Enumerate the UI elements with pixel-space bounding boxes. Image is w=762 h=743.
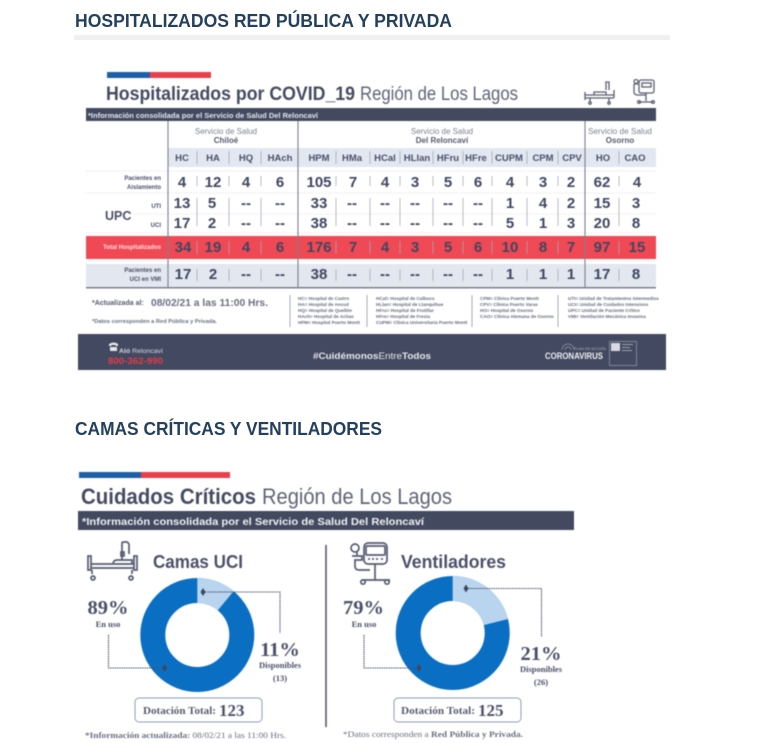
legend of abbreviations: HFre= Hospital de Fresia [376, 314, 430, 319]
hashtag: #Cuidémonos EntreTodos [313, 351, 431, 362]
table bands [86, 148, 656, 288]
row: aislamiento: 6 [276, 174, 284, 191]
row labels: Pacientes en [124, 268, 161, 274]
row: UCI: 38 [311, 215, 327, 232]
row: UCI: 20 [594, 215, 610, 232]
row: UCI en VMI: -- [275, 266, 285, 283]
service headers: Del Reloncaví [416, 136, 469, 145]
row: total hospitalizados [175, 239, 645, 256]
legend of abbreviations: HPM= Hospital Puerto Montt [298, 320, 360, 325]
hospital codes [175, 153, 646, 164]
phone number: 800-362-990 [108, 356, 163, 366]
legend of abbreviations: HO= Hospital de Osorno [480, 308, 533, 313]
row: total hospitalizados: 15 [629, 239, 645, 256]
panel title: Cuidados Críticos [81, 484, 256, 509]
row: aislamiento: 4 [381, 174, 390, 191]
row: aislamiento: 4 [242, 174, 251, 191]
information bar: *Información consolidada por el Servicio de Salud Del Reloncaví [82, 516, 425, 528]
row: total hospitalizados: 8 [539, 239, 547, 256]
row: UTI: 4 [539, 195, 548, 212]
row: UTI: -- [473, 195, 483, 212]
row: aislamiento: 4 [506, 174, 515, 191]
heading: ventiladores: Ventiladores [401, 552, 506, 572]
row labels: Pacientes en [124, 176, 161, 182]
service headers: Chiloé [214, 136, 239, 145]
row: total hospitalizados: 5 [444, 239, 452, 256]
hospital codes: HFru [437, 153, 459, 164]
row: UCI: -- [380, 215, 390, 232]
row: UTI: -- [410, 195, 420, 212]
row: UCI: 1 [539, 215, 547, 232]
hospital codes: CAO [624, 153, 646, 164]
row: UCI en VMI: 17 [175, 266, 191, 283]
hospital codes: HMa [342, 153, 363, 164]
row: aislamiento: 105 [306, 174, 332, 191]
row: total hospitalizados: 176 [306, 239, 332, 256]
UPC label: UPC [105, 209, 131, 223]
row: UTI: 5 [208, 195, 216, 212]
row labels: UTI [151, 204, 161, 210]
update note: *Datos corresponden a Red Pública y Privada. [92, 319, 218, 325]
row: UCI: -- [275, 215, 285, 232]
legend of abbreviations [298, 296, 659, 325]
hospital codes: HO [596, 153, 610, 164]
row: UCI [174, 215, 640, 232]
row: aislamiento [178, 174, 642, 191]
row: total hospitalizados: 6 [474, 239, 482, 256]
icon: phone [109, 342, 118, 351]
service headers [195, 127, 652, 145]
legend of abbreviations: CPM= Clínica Puerto Montt [480, 296, 539, 301]
stat: 21% disponibles [520, 643, 563, 687]
row: total hospitalizados: 19 [205, 239, 221, 256]
hospital codes: HAch [268, 153, 293, 164]
row labels: Aislamiento [127, 185, 161, 191]
row: UCI: 2 [208, 215, 216, 232]
row: UTI: 15 [594, 195, 610, 212]
row: UTI: 13 [174, 195, 190, 212]
row: total hospitalizados: 4 [381, 239, 390, 256]
hospital codes: CUPM [495, 153, 523, 164]
stat: 89% en uso [88, 597, 128, 629]
row: aislamiento: 2 [567, 174, 575, 191]
row: UCI en VMI: 2 [209, 266, 217, 283]
row: aislamiento: 12 [205, 174, 221, 191]
icon: ventilator [634, 80, 654, 103]
row: total hospitalizados: 6 [276, 239, 284, 256]
stat: 11% disponibles: 11% [260, 639, 300, 661]
row: UCI en VMI: -- [473, 266, 483, 283]
row: total hospitalizados: 7 [349, 239, 357, 256]
panel: cuidados criticos [78, 472, 574, 740]
donut: camas UCI 89/11 [153, 590, 242, 680]
panel title [106, 84, 518, 105]
stat: 11% disponibles: Disponibles [259, 660, 302, 670]
row: aislamiento: 6 [474, 174, 482, 191]
service column dividers [168, 121, 585, 288]
legend separators [290, 295, 558, 327]
service headers: Osorno [606, 136, 634, 145]
total box: 125: 125 [478, 701, 504, 720]
note: data scope: *Datos corresponden a Red Pública y Privada. [343, 729, 523, 739]
flag colour bar [79, 472, 230, 478]
row labels: UCI [151, 223, 161, 229]
stat: 21% disponibles: (26) [534, 677, 548, 687]
hospital codes: HA [206, 153, 220, 164]
row labels: Total Hospitalizados [103, 245, 162, 251]
phone line: Aló Reloncaví [119, 348, 163, 355]
row: UCI: 5 [506, 215, 514, 232]
row: aislamiento: 3 [539, 174, 547, 191]
row: UCI en VMI: -- [347, 266, 357, 283]
row: UCI en VMI: 1 [567, 266, 575, 283]
heading: camas criticas: CAMAS CRÍTICAS Y VENTILADORES [75, 418, 382, 439]
row: UTI [174, 195, 640, 212]
legend of abbreviations: HFru= Hospital de Frutillar [376, 308, 434, 313]
row: aislamiento: 62 [594, 174, 610, 191]
row: UCI en VMI: 38 [311, 266, 327, 283]
stat: 21% disponibles: 21% [520, 643, 562, 665]
row: aislamiento: 4 [633, 174, 642, 191]
stat: 21% disponibles: Disponibles [520, 664, 563, 674]
total box: 123: 123 [219, 701, 244, 720]
row: UCI: -- [410, 215, 420, 232]
stat: 79% en uso [343, 597, 384, 629]
stat: 11% disponibles: (13) [273, 673, 287, 683]
update note: 08/02/21 a las 11:00 Hrs. [151, 298, 268, 309]
total box: 125: Dotación Total: [401, 705, 475, 717]
leader: en uso [108, 635, 167, 672]
row: UTI: -- [443, 195, 453, 212]
legend of abbreviations: CPV= Clínica Puerto Varas [480, 302, 538, 307]
hospital codes: CPM [532, 153, 554, 164]
flag colour bar [107, 72, 211, 78]
row: total hospitalizados: 4 [242, 239, 251, 256]
row: UCI en VMI: -- [241, 266, 251, 283]
icon: bed [88, 542, 137, 580]
information bar [78, 511, 574, 530]
hospital codes: HPM [308, 153, 330, 164]
leader: en uso [364, 635, 422, 672]
row: UTI: 2 [567, 195, 575, 212]
legend of abbreviations: HLlan= Hospital de Llanquihue [376, 302, 444, 307]
plan de accion label: PLAN DE ACCIÓN [574, 346, 606, 351]
legend of abbreviations: HC= Hospital de Castro [298, 296, 349, 301]
row: aislamiento: 4 [178, 174, 187, 191]
hospital codes: HC [175, 153, 189, 164]
row: UCI: -- [241, 215, 251, 232]
row: aislamiento: 3 [411, 174, 419, 191]
leader: disponibles [200, 588, 280, 633]
row: total hospitalizados: 97 [594, 239, 610, 256]
stat: 79% en uso: En uso [352, 619, 376, 629]
leader: disponibles [464, 584, 542, 637]
total box: 125 [394, 698, 521, 722]
row: UCI en VMI: -- [380, 266, 390, 283]
cell separators [197, 151, 619, 281]
service headers: Servicio de Salud [588, 127, 652, 136]
information bar: *Información consolidada por el Servicio de Salud Del Reloncaví [88, 113, 319, 120]
row: total hospitalizados: 3 [411, 239, 419, 256]
row: UTI: 3 [632, 195, 640, 212]
stat: 11% disponibles [259, 639, 302, 683]
row: aislamiento: 7 [349, 174, 357, 191]
donut: ventiladores 79/21 [408, 588, 497, 678]
legend of abbreviations: CAO= Clínica Alemana de Osorno [480, 314, 554, 319]
divider [325, 545, 327, 727]
row: total hospitalizados: 34 [175, 239, 192, 256]
row: total hospitalizados: 7 [567, 239, 575, 256]
hospital codes: HCal [374, 153, 396, 164]
stat: 79% en uso: 79% [343, 597, 384, 619]
service headers: Servicio de Salud [195, 127, 257, 136]
row labels: UCI en VMI [130, 277, 161, 283]
logo box [610, 342, 636, 366]
row labels [103, 176, 162, 283]
panel title [81, 484, 452, 509]
update note: *Actualizada al: [92, 300, 144, 307]
icon: coronavirus arc [562, 344, 574, 350]
row: UTI: 33 [311, 195, 327, 212]
legend of abbreviations: UCI= Unidad de Cuidados Intensivos [568, 302, 649, 307]
panel title: Región de Los Lagos [360, 84, 518, 105]
stat: 89% en uso: 89% [88, 597, 128, 619]
row: UTI: -- [275, 195, 285, 212]
hospital codes: HQ [239, 153, 253, 164]
row: UTI: -- [347, 195, 357, 212]
legend of abbreviations: HCal= Hospital de Calbuco [376, 296, 435, 301]
coronavirus label: CORONAVIRUS [545, 351, 603, 361]
legend of abbreviations: VMI= Ventilación Mecánica Invasiva [568, 314, 646, 319]
legend of abbreviations: HQ= Hospital de Quellón [298, 308, 352, 313]
row: UCI en VMI: 1 [506, 266, 514, 283]
update note [92, 298, 268, 325]
legend of abbreviations: UPC= Unidad de Paciente Crítico [568, 308, 640, 313]
note: information date: *Información actualizada: 08/02/21 a las 11:00 Hrs. [85, 730, 286, 740]
information bar [86, 108, 656, 121]
row: UCI: 8 [632, 215, 640, 232]
total box: 123 [135, 698, 262, 722]
row: UCI en VMI: 1 [539, 266, 547, 283]
panel title: Región de Los Lagos [262, 484, 452, 509]
row: UCI: 3 [567, 215, 575, 232]
row: UCI en VMI: -- [410, 266, 420, 283]
service headers: Servicio de Salud [411, 127, 473, 136]
hospital codes: HLlan [404, 153, 430, 164]
row: total hospitalizados: 10 [502, 239, 518, 256]
hospital codes: HFre [465, 153, 487, 164]
legend of abbreviations: UTI= Unidad de Tratamientos Intermedios [568, 296, 659, 301]
row: UTI: -- [380, 195, 390, 212]
legend of abbreviations: HAch= Hospital de Achao [298, 314, 354, 319]
row: UCI: -- [347, 215, 357, 232]
panel title: Hospitalizados por COVID_19 [106, 84, 355, 105]
heading: hospitalizados: HOSPITALIZADOS RED PÚBLICA Y PRIVADA [75, 10, 452, 31]
legend of abbreviations: HA= Hospital de Ancud [298, 302, 349, 307]
row: UCI en VMI [175, 266, 640, 283]
hospital codes: CPV [562, 153, 582, 164]
row: UCI en VMI: 17 [594, 266, 610, 283]
heading: camas UCI: Camas UCI [153, 552, 243, 572]
row: UCI: 17 [174, 215, 190, 232]
dotted row rules [86, 171, 656, 261]
panel: hospitalizados por COVID-19 [78, 72, 666, 370]
total box: 123: Dotación Total: [143, 705, 216, 717]
icon: ventilator [351, 543, 390, 584]
row: UTI: -- [241, 195, 251, 212]
stat: 89% en uso: En uso [96, 619, 120, 629]
footer band [78, 334, 666, 370]
row: aislamiento: 5 [444, 174, 452, 191]
icon: bed [585, 82, 614, 104]
row: UCI en VMI: -- [443, 266, 453, 283]
row: UTI: 1 [506, 195, 514, 212]
row: UCI en VMI: 8 [632, 266, 640, 283]
legend of abbreviations: CUPM= Clínica Universitaria Puerto Montt [376, 320, 468, 325]
row: UCI: -- [473, 215, 483, 232]
row: UCI: -- [443, 215, 453, 232]
